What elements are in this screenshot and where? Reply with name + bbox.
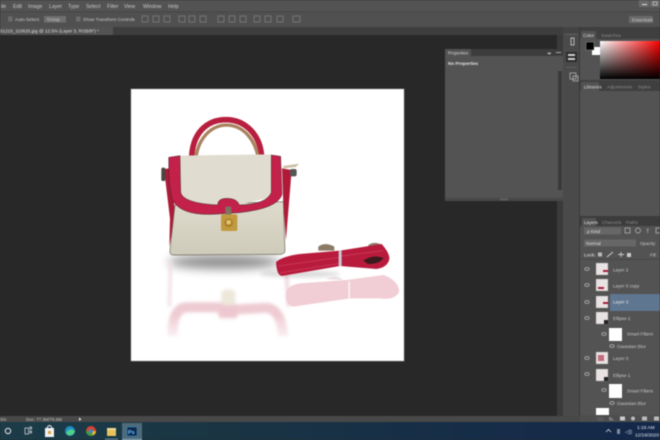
menu bar: Filter — [107, 4, 119, 10]
libraries panel tabs: Libraries — [584, 84, 602, 90]
red flap trim — [169, 155, 282, 214]
white document canvas — [131, 89, 404, 361]
layers panel — [580, 216, 660, 422]
system tray: 1:18 AM — [637, 425, 655, 431]
menu bar: ile — [1, 4, 6, 10]
side gussets and hardware — [282, 168, 292, 240]
status bar: 5% — [0, 417, 6, 422]
lock row — [584, 252, 657, 258]
menu bar: Image — [28, 4, 43, 10]
status bar: Doc: 77.3M/76.9M — [26, 417, 62, 422]
menu bar: View — [124, 4, 135, 10]
options bar: Show Transform Controls — [83, 17, 136, 22]
bag body — [170, 202, 285, 255]
layer filter row: T — [646, 229, 650, 235]
layer rows: Layer 3 — [613, 300, 629, 304]
blend mode row: Normal — [586, 241, 601, 246]
system tray — [606, 425, 659, 438]
color picker gradient — [600, 41, 660, 79]
color panel — [580, 27, 660, 216]
properties panel: No Properties — [448, 61, 479, 66]
layer rows: Gaussian Blur — [617, 401, 646, 406]
options bar: Essentials — [632, 18, 654, 22]
icon: file explorer — [105, 428, 118, 440]
collapsed icon dock — [563, 27, 660, 416]
lock row: Fill: — [650, 252, 657, 258]
menu bar: Select — [86, 4, 101, 10]
blend mode row: Opacity: — [640, 241, 656, 246]
menu bar: Type — [68, 4, 79, 10]
color panel: Color — [583, 33, 594, 38]
bag shadow — [168, 255, 280, 269]
strap reflection — [286, 275, 399, 307]
menu bar: Edit — [13, 4, 22, 10]
blend mode row — [584, 240, 656, 246]
layers footer icons: GD — [597, 416, 604, 422]
layer filter row — [584, 228, 660, 235]
properties panel: ◂▸ — [547, 50, 551, 56]
menu bar: Window — [143, 4, 162, 10]
properties panel — [445, 49, 563, 201]
workspace scrollbar — [557, 35, 563, 416]
selected layer highlight — [610, 294, 660, 311]
system tray: ◁)) — [625, 430, 633, 436]
layer rows: Gaussian Blur — [617, 344, 646, 349]
strap shadow — [260, 270, 340, 278]
layer rows — [585, 263, 654, 415]
layer rows: Layer 2 — [613, 268, 629, 272]
layer rows: Layer 0 — [613, 356, 629, 361]
document tab bar — [0, 27, 563, 35]
layer rows: Ellipse 2 — [613, 316, 631, 321]
bag flap — [179, 154, 273, 207]
options bar — [0, 12, 660, 27]
shoulder strap — [276, 243, 389, 276]
menu bar — [0, 0, 660, 12]
layer rows: Ellipse 1 — [613, 373, 631, 378]
color panel: Swatches — [601, 33, 622, 38]
layers panel: Layers — [584, 220, 598, 225]
status bar — [0, 416, 580, 422]
icon: chrome — [86, 426, 96, 436]
options bar: Group — [47, 17, 60, 22]
libraries panel tabs: Adjustments — [607, 84, 633, 90]
icon: photoshop active: Ps — [128, 430, 135, 436]
layer rows: Smart Filters — [627, 332, 654, 336]
menu bar: Help — [168, 4, 179, 10]
handbag — [161, 120, 299, 255]
foreground and background swatches — [586, 42, 600, 55]
layer rows: Smart Filters — [627, 388, 654, 394]
bag handle — [189, 120, 264, 168]
layer filter row: ρ Kind — [587, 229, 601, 234]
libraries panel tabs: Styles — [638, 84, 651, 90]
icon: store — [45, 426, 54, 437]
canvas workspace — [0, 35, 563, 416]
properties panel: Properties — [448, 50, 469, 56]
bag reflection — [157, 260, 300, 345]
windows taskbar — [0, 422, 660, 440]
icon: task view — [25, 427, 32, 434]
system tray: 12/16/2020 — [635, 432, 659, 438]
options bar: Auto-Select: — [15, 17, 40, 22]
gold clasp — [221, 207, 237, 231]
layers panel: Paths — [626, 220, 638, 225]
layer rows: Layer 0 copy — [613, 284, 640, 288]
document tab bar: 01215_110625.jpg @ 12.5% (Layer 3, RGB/8*) * — [0, 28, 99, 34]
icon: cortana — [5, 428, 11, 434]
lock row: Lock: — [584, 252, 596, 258]
menu bar: Layer — [49, 4, 62, 10]
icon: edge — [65, 426, 75, 436]
libraries panel tabs — [580, 80, 660, 91]
layers footer icons — [580, 415, 660, 422]
layers panel: Channels — [602, 220, 622, 225]
layers footer icons: fx. — [609, 416, 614, 422]
icon: photoshop active — [122, 423, 142, 440]
